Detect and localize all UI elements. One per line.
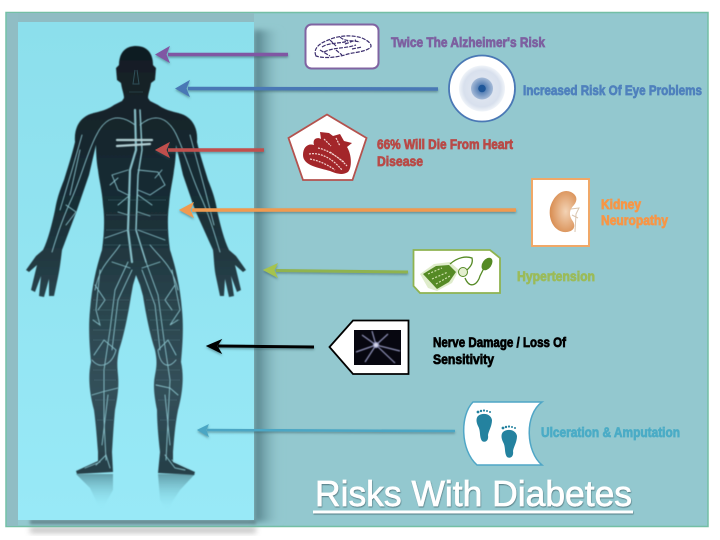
text: kidney neuropathy [601,196,668,228]
icon: neuron [330,320,408,374]
face highlights [129,70,143,92]
body panel [7,13,256,526]
icon: kidney [532,179,589,246]
arrow: nerve damage [207,340,314,353]
text: nerve damage: Sensitivity [433,351,494,367]
title: Risks With Diabetes [315,473,632,514]
text: nerve damage [433,334,566,367]
panel shadow [254,30,282,522]
silhouette [26,46,246,475]
text: heart disease: 66% Will Die From Heart [377,136,513,152]
text: alzheimer's risk: Twice The Alzheimer's Risk [391,34,545,50]
arrow: brain [156,47,288,62]
icon: eye [449,56,515,122]
arrow: feet [198,425,455,436]
text: nerve damage: Nerve Damage / Loss Of [433,334,566,350]
text: ulceration and amputation: Ulceration & Amputation [541,424,680,440]
human body figure with blood vessels [26,46,246,510]
icon: heart [288,114,366,180]
page drop shadow [30,527,256,533]
text: hypertension: Hypertension [517,268,595,284]
text: heart disease: Disease [377,153,423,169]
arrow: kidney [180,203,516,217]
icon: feet [464,402,542,465]
reflection of feet [76,474,195,510]
text: heart disease [377,136,513,169]
muscle shading [93,200,180,420]
text: kidney neuropathy: Neuropathy [601,212,668,228]
arrow: eye [176,81,438,96]
blood vessels [52,110,220,470]
text: kidney neuropathy: Kidney [601,196,641,212]
arrow: heart [156,143,264,157]
icon: brain [306,24,378,68]
icon: blood pressure monitor [414,250,500,293]
arrow: hypertension [264,264,408,277]
